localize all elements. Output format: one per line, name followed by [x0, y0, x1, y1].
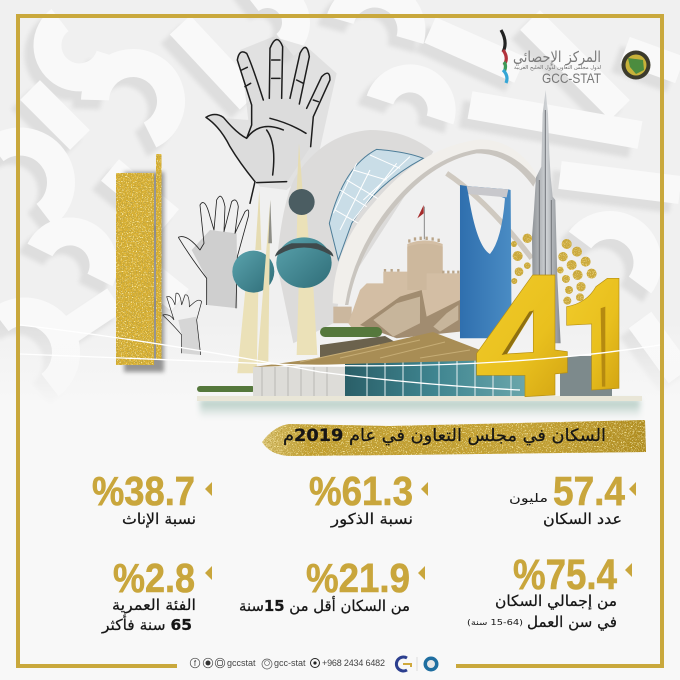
flag [417, 205, 424, 239]
hall white wing [253, 367, 345, 398]
kuwait towers [232, 143, 333, 373]
pavilion building [197, 327, 642, 418]
banner title: السكان في مجلس التعاون في عام 2019م [283, 426, 606, 446]
gold bar I [116, 154, 164, 372]
grey arch [277, 130, 433, 343]
value: %38.7 [92, 468, 195, 514]
phone: +968 2434 6482 [322, 658, 385, 668]
icon: whatsapp [310, 658, 320, 668]
handle gccstat: gccstat [227, 658, 256, 668]
icon: instagram [215, 658, 225, 668]
logo: G mark [396, 657, 411, 671]
arrow [205, 566, 212, 580]
arrow [421, 482, 428, 496]
glass dome [329, 149, 423, 260]
footer [190, 656, 438, 672]
stat: females [92, 468, 212, 528]
unit: مليون [509, 491, 548, 506]
value: %75.4 [513, 551, 617, 599]
logo: GCC-STAT wordmark [501, 30, 601, 86]
icon: facebook [190, 658, 200, 668]
label line 2: 65 سنة فأكثر [101, 614, 192, 634]
stat: population [509, 468, 636, 528]
GCC-STAT: GCC-STAT [542, 70, 601, 86]
stat: males [309, 468, 428, 528]
label: نسبة الذكور [330, 510, 413, 528]
arrow [205, 482, 212, 496]
banner [262, 420, 646, 456]
background letter pattern [0, 0, 680, 410]
water [200, 400, 640, 418]
main tower [275, 143, 333, 355]
stat: working age [467, 551, 632, 632]
age range: (15-64 سنة) [467, 618, 523, 627]
digit 4 [477, 275, 567, 397]
number 41 [477, 275, 619, 397]
light streaks [20, 325, 660, 390]
arrow [629, 482, 636, 496]
brush stroke [262, 420, 646, 456]
stat: over 65 [101, 555, 212, 634]
logo ribbon [501, 30, 507, 83]
label line 1: من إجمالي السكان [495, 592, 617, 611]
handle gcc-stat: gcc-stat [274, 658, 306, 668]
value: %2.8 [113, 555, 195, 601]
icon: facebook: f [194, 659, 197, 668]
label: من السكان أقل من 15سنة [239, 596, 410, 615]
thin brace [447, 173, 532, 258]
white arch [333, 139, 538, 305]
dark eave [320, 336, 400, 362]
small hand [163, 293, 202, 355]
stat: under 15 [239, 555, 425, 615]
arabic subtitle: لدول مجلس التعاون لدول الخليج العربية [514, 65, 601, 71]
digit 1 [567, 278, 619, 390]
distant lattice dome [453, 162, 535, 250]
burj khalifa [532, 90, 561, 343]
left tower [232, 190, 274, 373]
roof [253, 332, 500, 367]
label line 1: الفئة العمرية [112, 596, 196, 614]
value: 57.4 [553, 468, 625, 514]
right buildings [560, 356, 612, 398]
ledge [197, 396, 642, 401]
medium hand [178, 196, 249, 308]
icon: twitter [203, 658, 213, 668]
middle spike [257, 200, 272, 363]
logo: TUV [424, 656, 438, 672]
gold dots [511, 234, 597, 305]
value: %61.3 [309, 468, 413, 514]
label: عدد السكان [543, 510, 622, 528]
value: %21.9 [306, 555, 410, 601]
trees [197, 327, 382, 394]
arrow [418, 566, 425, 580]
arrow [625, 563, 632, 577]
logo: GCC emblem [622, 50, 650, 80]
hands illustration [163, 37, 337, 355]
label line 2: في سن العمل [527, 613, 617, 632]
arches and dome [277, 130, 538, 343]
large hand [206, 37, 337, 203]
label: نسبة الإناث [122, 510, 196, 528]
arabic name: المركز الإحصائي [513, 48, 601, 67]
glass wall [345, 358, 525, 398]
icon: snapchat [262, 659, 272, 669]
kingdom tower [460, 185, 512, 338]
fort [333, 205, 460, 338]
